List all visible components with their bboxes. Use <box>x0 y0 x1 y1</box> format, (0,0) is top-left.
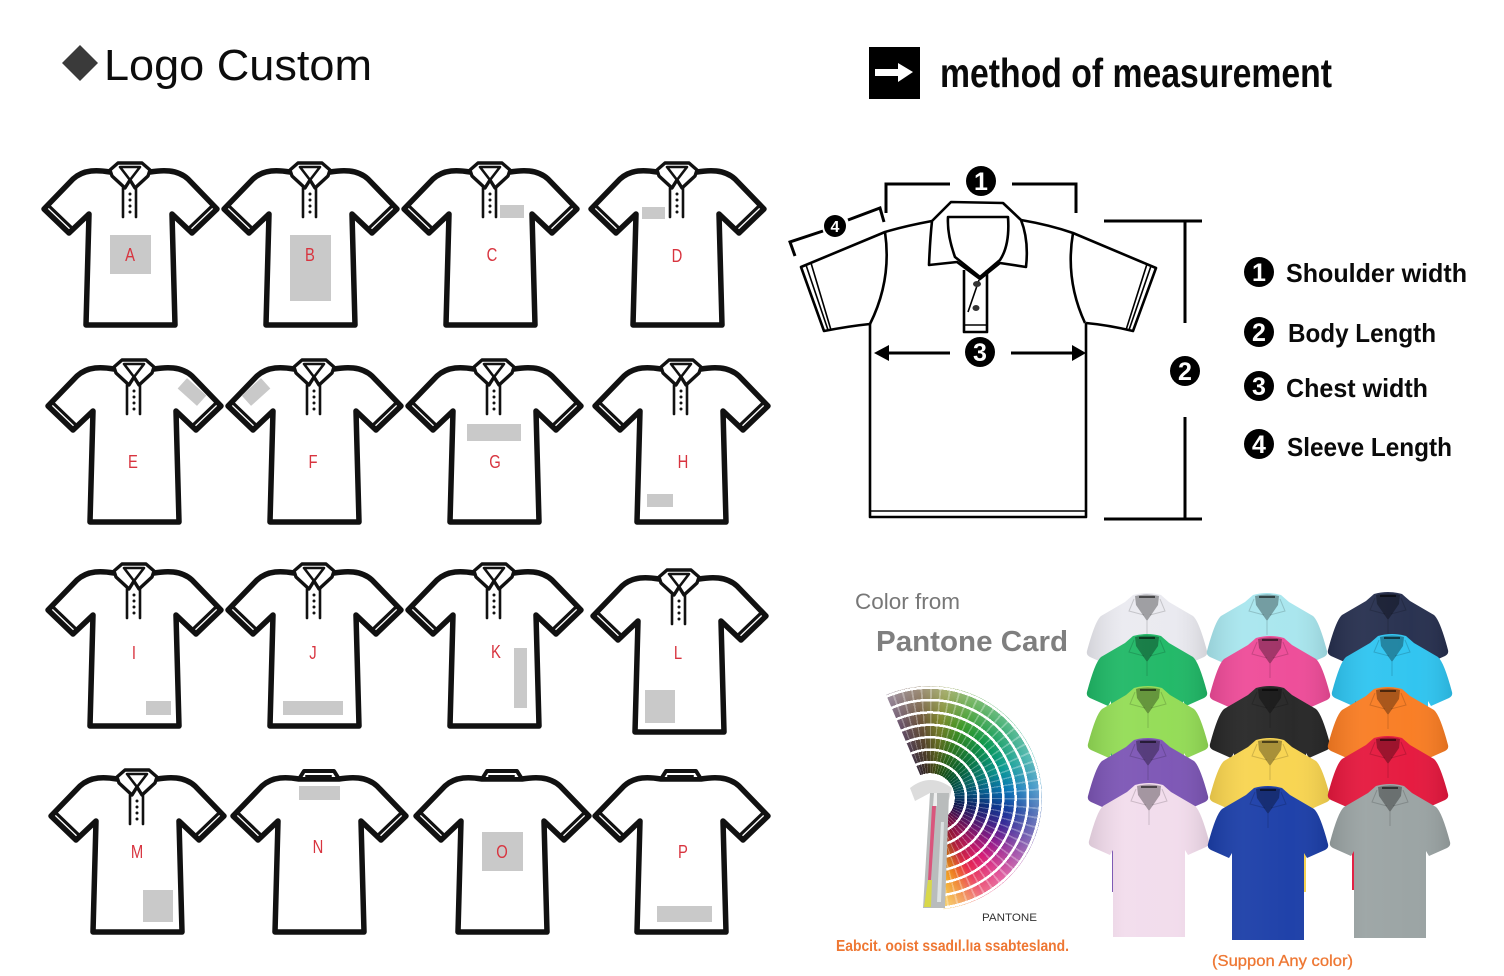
legend item 2: Body Length <box>1288 318 1436 348</box>
shirt M: M <box>131 841 143 862</box>
shirts row 3 <box>1088 686 1448 841</box>
shirts row 2 <box>1087 634 1452 790</box>
caption: fabric colour note: Eabcit. ooist ssadıl.lıa ssabtesland. <box>836 938 1069 955</box>
shirt C <box>404 163 577 325</box>
shirt H: H <box>678 451 688 472</box>
shirts row 1 <box>1087 592 1448 747</box>
legend: measurement names <box>1244 257 1467 462</box>
shirt A <box>44 163 217 325</box>
dimension 2: body length: 2 <box>1178 358 1192 386</box>
legend item 4 <box>1244 429 1452 462</box>
shirt M <box>51 770 224 932</box>
shirt I <box>48 564 221 726</box>
caption: support any colour: (Suppon Any color) <box>1212 953 1353 970</box>
shirt E <box>48 360 221 522</box>
legend item 3: 3 <box>1252 373 1266 401</box>
shirt F <box>228 360 401 522</box>
shirt N <box>233 771 406 932</box>
legend item 2: 2 <box>1252 319 1266 347</box>
shirts row 5 <box>1089 783 1450 940</box>
measurement diagram <box>790 166 1202 519</box>
title text: Logo Custom <box>104 41 372 90</box>
heading: method of measurement <box>869 47 1332 99</box>
icon: diamond bullet <box>62 45 98 81</box>
dimension 1: shoulder width: 1 <box>974 168 988 196</box>
shirt B: B <box>305 244 315 265</box>
dimension 1: shoulder width <box>886 166 1076 213</box>
shirts row 4 <box>1088 736 1448 892</box>
shirt D: D <box>672 245 682 266</box>
shirt P <box>595 771 768 932</box>
dimension 4: sleeve length <box>790 208 884 256</box>
shirt K <box>408 564 581 726</box>
icon: Pantone fan handle <box>910 780 952 908</box>
legend item 4: Sleeve Length <box>1287 432 1452 462</box>
dimension 3: chest width: 3 <box>973 339 987 367</box>
shirt B <box>224 163 397 325</box>
shirt I: I <box>132 642 136 663</box>
legend item 4: 4 <box>1252 431 1266 459</box>
polo outline <box>801 202 1156 517</box>
collar <box>929 202 1027 279</box>
dimension 4: sleeve length: 4 <box>831 219 840 236</box>
caption: PANTONE: PANTONE <box>982 912 1037 924</box>
shirt H <box>595 360 768 522</box>
shirt D <box>591 163 764 325</box>
shirt A: A <box>125 244 136 265</box>
text: Pantone Card: Pantone Card <box>876 626 1068 658</box>
panel: logo placement shirts <box>44 163 768 932</box>
shirt O: O <box>496 841 508 862</box>
shirt P: P <box>678 841 688 862</box>
shirt J <box>228 564 401 726</box>
legend item 1: Shoulder width <box>1286 258 1467 288</box>
heading text: method of measurement <box>940 50 1332 96</box>
shirt G: G <box>489 451 501 472</box>
heading: Logo Custom <box>62 41 372 90</box>
legend item 1: 1 <box>1252 259 1266 287</box>
shirt F: F <box>308 451 318 472</box>
chart: Pantone colour fan <box>886 686 1042 910</box>
panel: coloured polo shirts <box>1087 592 1452 940</box>
dimension 2: body length <box>1104 221 1202 519</box>
shirt C: C <box>487 244 497 265</box>
shirt L <box>593 570 766 732</box>
shirt N: N <box>313 836 323 857</box>
shirt J: J <box>309 642 317 663</box>
shirt K: K <box>491 641 501 662</box>
shirt E: E <box>128 451 138 472</box>
shirt G <box>408 360 581 522</box>
shirt L: L <box>674 642 682 663</box>
icon: arrow box <box>869 47 920 99</box>
legend item 3: Chest width <box>1286 373 1428 403</box>
placket <box>964 270 987 332</box>
dimension 3: chest width <box>874 337 1086 367</box>
text: Color from: Color from <box>855 589 960 614</box>
shirt O <box>416 771 589 932</box>
